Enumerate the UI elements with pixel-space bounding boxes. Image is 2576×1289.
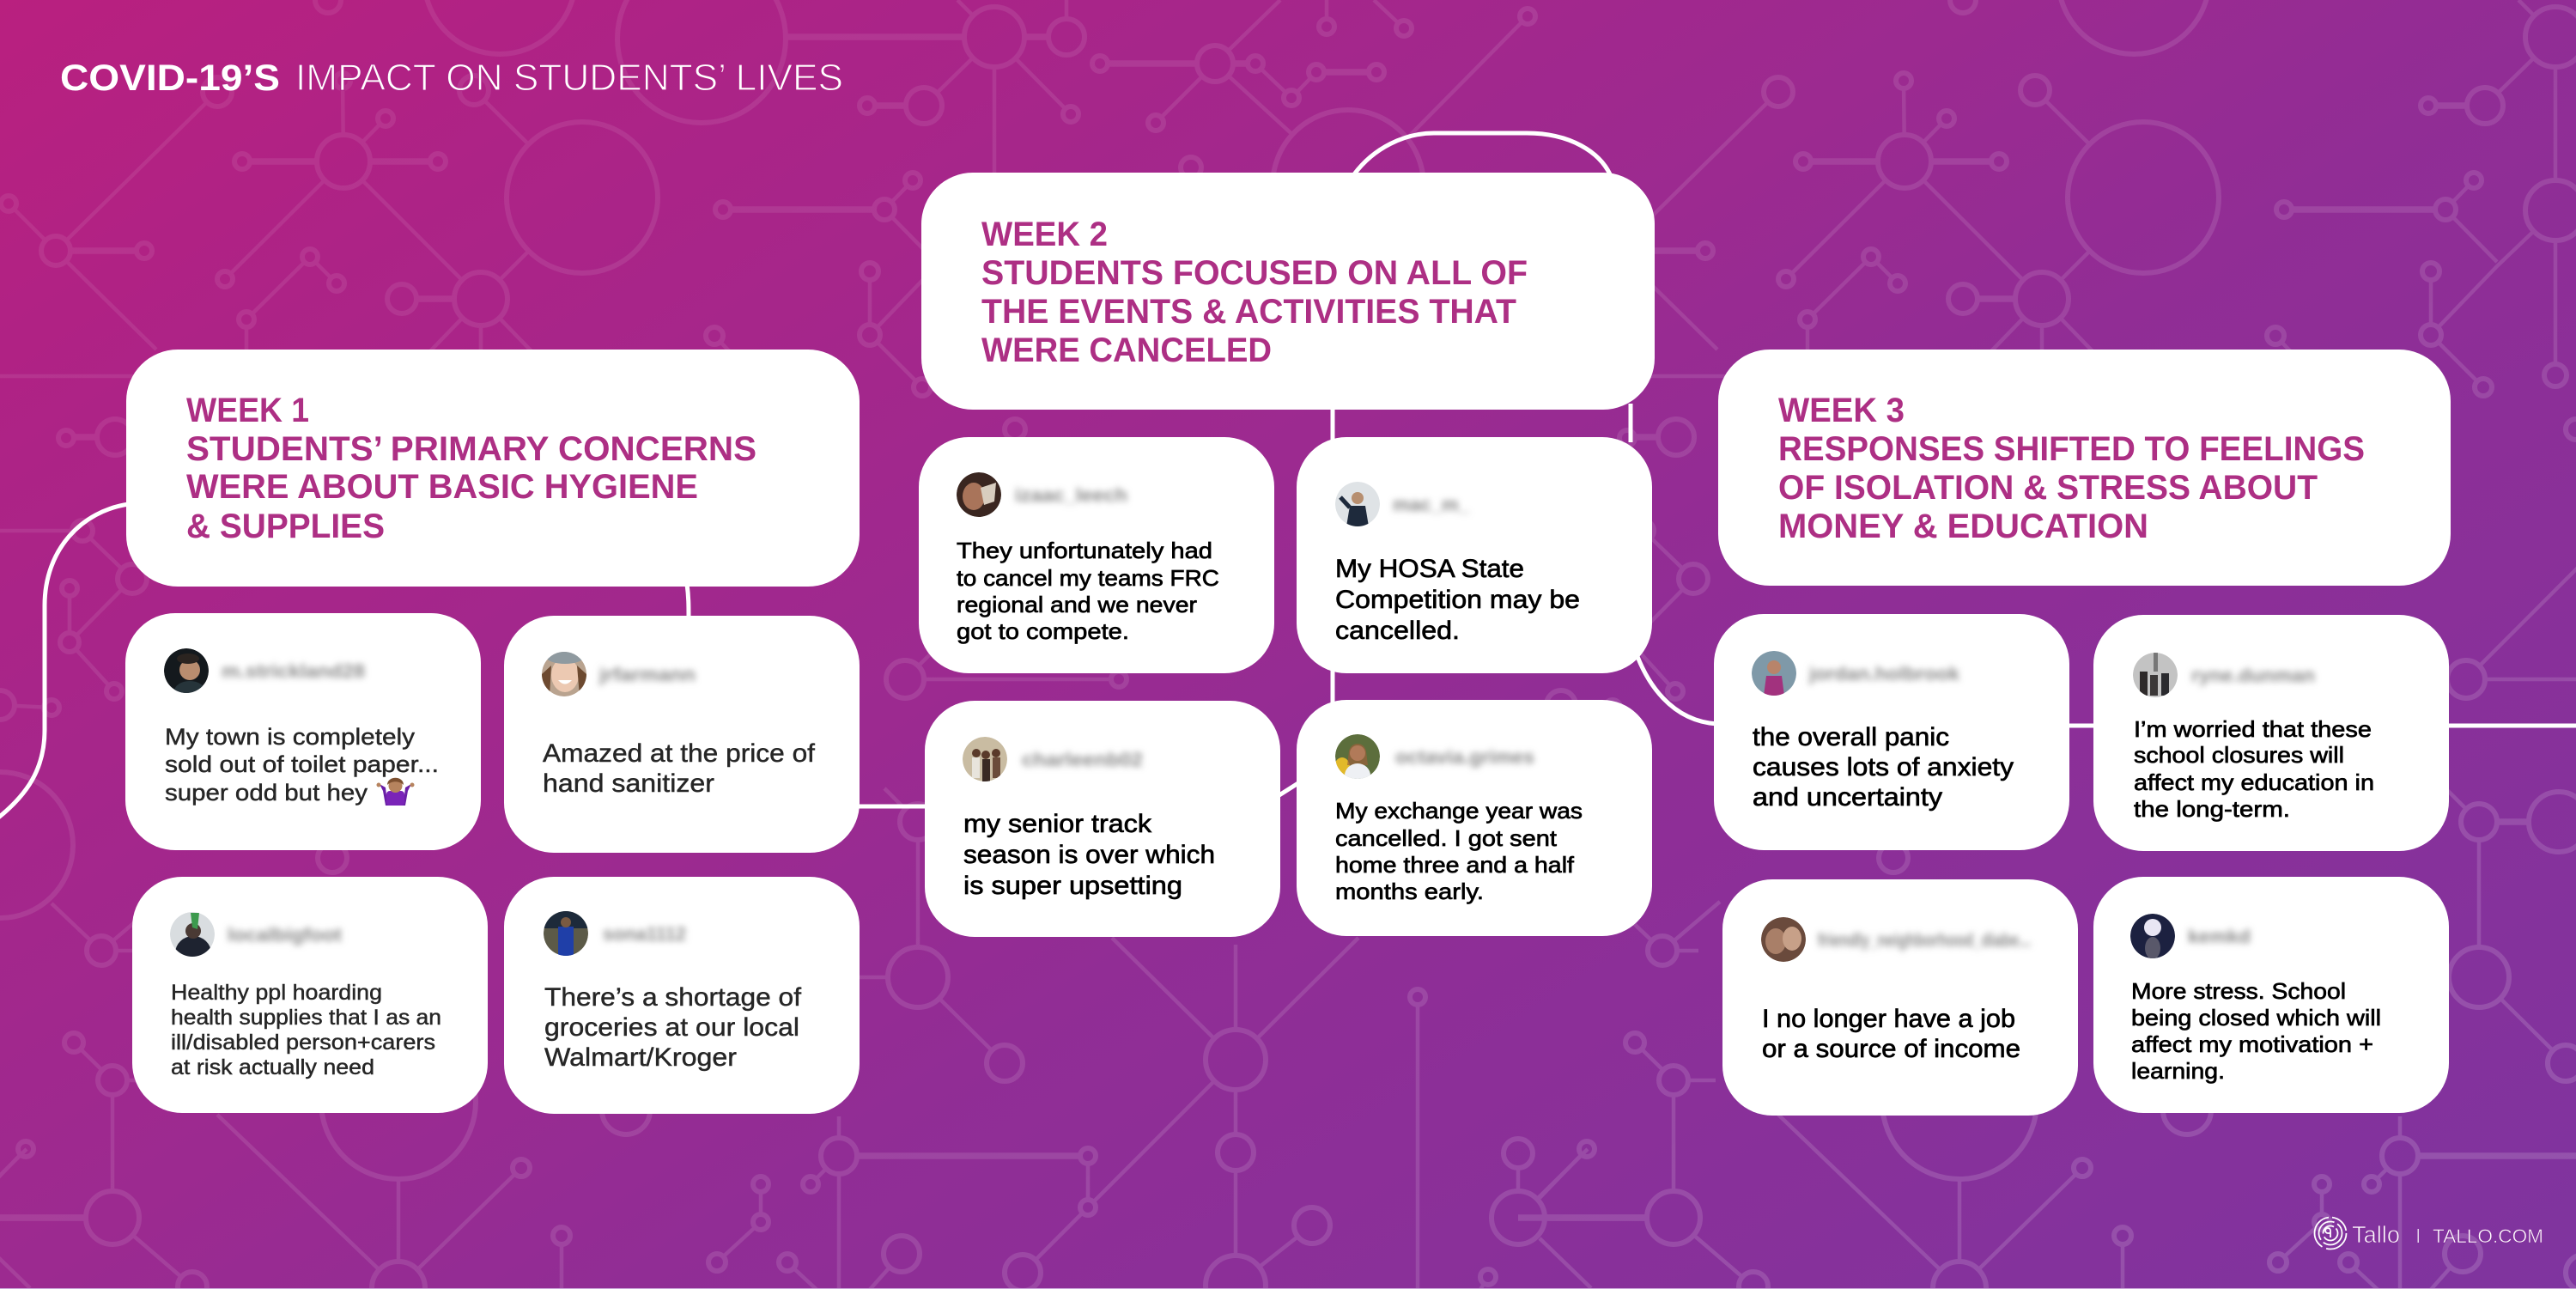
card: week 1 hand sanitizer: jrfarmann	[598, 664, 696, 685]
card: week 3 no job: or a source of income	[1762, 1035, 2020, 1063]
card: week 3 no job	[1722, 879, 2078, 1116]
card: week 2 FRC regional: izaac_leech	[1015, 484, 1127, 506]
card: week 3 school closures: I’m worried that these	[2134, 716, 2372, 742]
card: week 2 exchange year	[1297, 700, 1652, 936]
card: week 3 panic: causes lots of anxiety	[1753, 753, 2014, 781]
card: week 1 toilet paper: My town is completely	[165, 724, 416, 750]
card: week 2 track season: season is over which	[963, 841, 1215, 869]
card: week 1 health supplies	[132, 877, 488, 1113]
panel: week 3 heading: OF ISOLATION & STRESS ABOUT	[1778, 469, 2318, 507]
card: week 2 HOSA	[1297, 437, 1652, 673]
card: week 2 FRC regional: They unfortunately had	[957, 538, 1212, 563]
card: week 2 HOSA: cancelled.	[1335, 617, 1460, 645]
card: week 3 panic: jordan.holbrook	[1808, 663, 1960, 684]
card: week 2 track season: my senior track	[963, 810, 1152, 838]
card: week 2 FRC regional: to cancel my teams FRC	[957, 565, 1219, 591]
logo: Tallo: Tallo	[2352, 1221, 2400, 1248]
card: week 2 exchange year: months early.	[1335, 879, 1484, 904]
title: IMPACT ON STUDENTS’ LIVES	[295, 57, 843, 99]
card: week 2 FRC regional	[919, 437, 1274, 673]
panel: week 3 heading: WEEK 3	[1778, 392, 1905, 429]
card: week 3 school closures: school closures will	[2134, 742, 2344, 768]
icon: fingerprint mark	[2315, 1218, 2346, 1249]
card: week 1 toilet paper: m.strickland28	[222, 660, 365, 682]
card: week 1 groceries	[504, 877, 860, 1114]
card: week 1 hand sanitizer: hand sanitizer	[543, 769, 714, 798]
card: week 2 track season	[925, 701, 1280, 937]
card: week 3 more stress: kemkd	[2188, 926, 2251, 947]
card: week 3 school closures	[2093, 615, 2449, 851]
card: week 1 toilet paper: super odd but hey	[165, 780, 368, 806]
title	[60, 57, 843, 99]
panel: week 3 heading	[1718, 350, 2451, 586]
card: week 3 school closures: the long-term.	[2134, 796, 2290, 822]
panel: week 1 heading	[126, 350, 860, 587]
panel: week 1 heading: STUDENTS’ PRIMARY CONCERNS	[186, 430, 756, 468]
title: COVID-19’S	[60, 58, 280, 99]
panel: week 3 heading: RESPONSES SHIFTED TO FEELINGS	[1778, 430, 2365, 468]
card: week 1 groceries: There’s a shortage of	[544, 983, 802, 1012]
card: week 1 groceries: groceries at our local	[544, 1013, 799, 1042]
card: week 1 health supplies: at risk actually need	[171, 1055, 374, 1079]
card: week 1 health supplies: health supplies that I as an	[171, 1006, 441, 1030]
card: week 3 more stress: learning.	[2131, 1058, 2225, 1084]
card: week 1 health supplies: Healthy ppl hoarding	[171, 981, 382, 1005]
card: week 2 HOSA: My HOSA State	[1335, 555, 1524, 583]
card: week 1 health supplies: ill/disabled person+carers	[171, 1031, 435, 1055]
card: week 2 exchange year: My exchange year was	[1335, 798, 1583, 824]
card: week 1 health supplies: localbigfoot	[228, 924, 343, 945]
card: week 3 school closures: ryne.dunman	[2191, 665, 2315, 686]
card: week 3 panic: and uncertainty	[1753, 783, 1942, 812]
card: week 3 no job: friendly_neighborhood_diabe...	[1818, 929, 2031, 951]
card: week 2 exchange year: home three and a half	[1335, 852, 1575, 878]
card: week 2 exchange year: cancelled. I got sent	[1335, 825, 1558, 851]
card: week 3 panic: the overall panic	[1753, 723, 1949, 751]
card: week 3 more stress: being closed which will	[2131, 1005, 2381, 1031]
card: week 2 track season: charleenb02	[1022, 749, 1143, 770]
panel: week 1 heading: & SUPPLIES	[186, 508, 385, 545]
panel: week 2 heading	[921, 173, 1655, 410]
card: week 1 toilet paper	[125, 613, 481, 850]
card: week 3 more stress: affect my motivation +	[2131, 1031, 2373, 1057]
card: week 2 HOSA: mac_m_	[1393, 494, 1470, 515]
card: week 3 more stress: More stress. School	[2131, 978, 2346, 1004]
card: week 2 track season: is super upsetting	[963, 872, 1182, 900]
card: week 1 toilet paper: sold out of toilet paper...	[165, 751, 439, 777]
card: week 1 groceries: sona1112	[603, 923, 686, 945]
logo: Tallo	[2315, 1218, 2543, 1249]
card: week 2 HOSA: Competition may be	[1335, 586, 1580, 614]
card: week 3 school closures: affect my education in	[2134, 769, 2374, 795]
connector lines between panels	[0, 133, 2576, 818]
panel: week 2 heading: STUDENTS FOCUSED ON ALL OF	[981, 254, 1528, 292]
card: week 2 FRC regional: got to compete.	[957, 618, 1129, 644]
card: week 1 hand sanitizer: Amazed at the price of	[543, 739, 816, 768]
icon: shrug emoji	[376, 778, 414, 806]
panel: week 1 heading: WEEK 1	[186, 392, 309, 429]
card: week 1 groceries: Walmart/Kroger	[544, 1043, 737, 1072]
card: week 2 FRC regional: regional and we never	[957, 592, 1197, 617]
panel: week 1 heading: WERE ABOUT BASIC HYGIENE	[186, 468, 698, 506]
card: week 3 panic	[1714, 614, 2069, 850]
panel: week 2 heading: WEEK 2	[981, 216, 1108, 253]
logo: Tallo: TALLO.COM	[2433, 1225, 2543, 1247]
card: week 3 more stress	[2093, 877, 2449, 1113]
panel: week 2 heading: THE EVENTS & ACTIVITIES THAT	[981, 293, 1516, 331]
card: week 1 hand sanitizer	[504, 616, 860, 853]
panel: week 3 heading: MONEY & EDUCATION	[1778, 508, 2148, 545]
card: week 3 no job: I no longer have a job	[1762, 1005, 2015, 1033]
panel: week 2 heading: WERE CANCELED	[981, 331, 1272, 369]
card: week 2 exchange year: octavia.grimes	[1395, 746, 1534, 768]
